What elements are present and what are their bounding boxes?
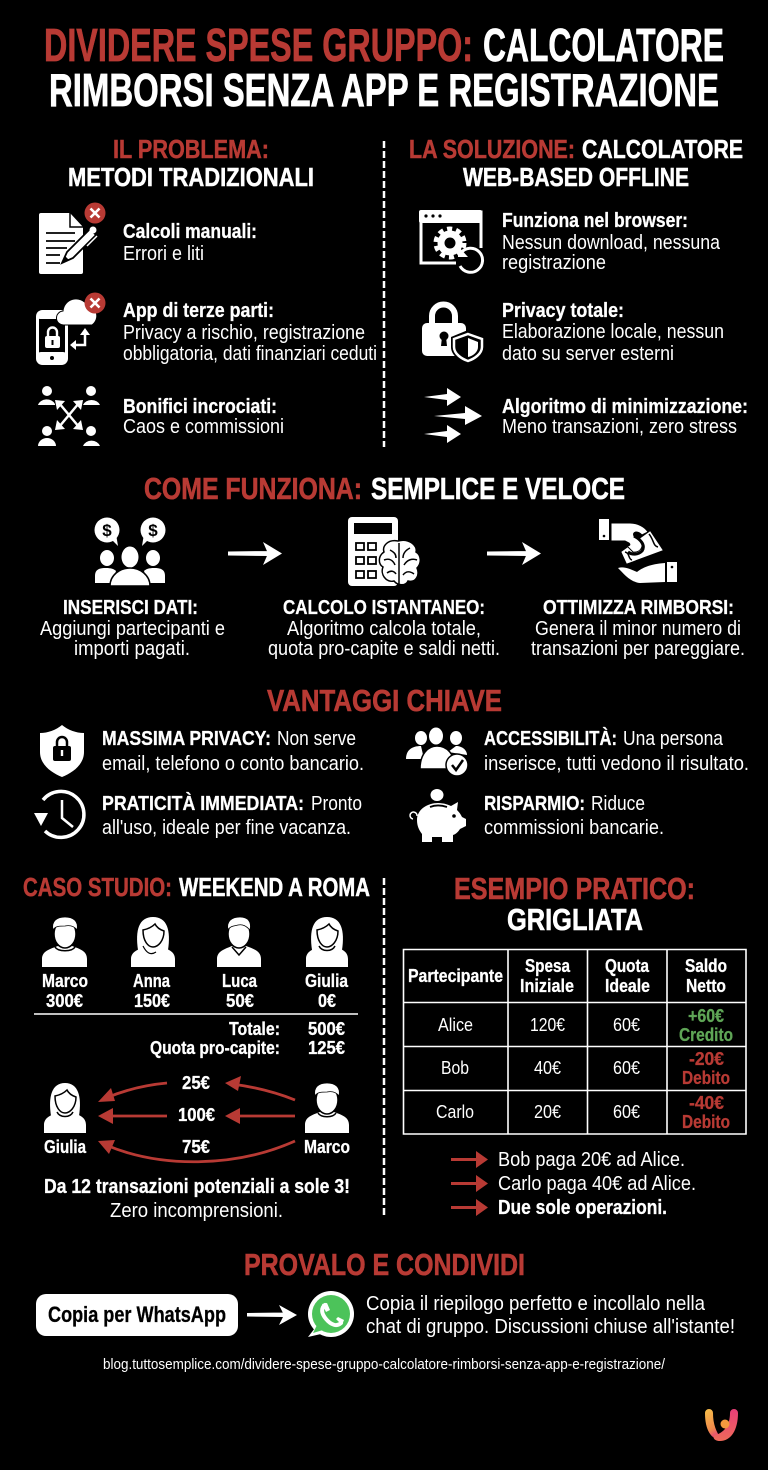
text: funziona nel browser: registrazione	[502, 252, 606, 274]
text: massima privacy	[102, 728, 364, 775]
table: expense breakdown: Netto	[686, 976, 726, 996]
text: funziona nel browser: Nessun download, nessuna	[502, 232, 721, 254]
table: expense breakdown: Spesa	[525, 956, 571, 976]
text: bonifici incrociati: Bonifici incrociati:	[123, 396, 277, 418]
text: whatsapp description	[366, 1293, 735, 1338]
text: payments	[498, 1149, 696, 1219]
transfer labels: 100€	[178, 1105, 215, 1125]
text: payments: Carlo paga 40€ ad Alice.	[498, 1173, 696, 1195]
text: payments: Bob paga 20€ ad Alice.	[498, 1149, 685, 1171]
panel: esempio pratico	[404, 871, 746, 1219]
arrows: marco to giulia transfers	[98, 1076, 295, 1162]
arrow	[247, 1305, 297, 1325]
text: risparmio: RISPARMIO:	[484, 793, 585, 815]
table: expense breakdown: Saldo	[685, 956, 727, 976]
text: ottimizza rimborsi: OTTIMIZZA RIMBORSI:	[543, 597, 734, 619]
participant labels: Luca	[222, 971, 258, 991]
text: massima privacy: MASSIMA PRIVACY:	[102, 728, 271, 750]
transfer labels: 25€	[182, 1073, 210, 1093]
text: privacy totale: Privacy totale:	[502, 300, 624, 322]
text: funziona nel browser: Funziona nel browser:	[502, 210, 688, 232]
panel: come funziona	[40, 471, 745, 660]
transfer labels: 75€	[182, 1137, 210, 1157]
table: expense breakdown: Debito	[682, 1112, 730, 1132]
text: app di terze parti	[123, 300, 377, 365]
table: expense breakdown: Credito	[679, 1025, 733, 1045]
icon: group with money bubbles: $	[102, 521, 112, 540]
table: expense breakdown: 20€	[534, 1102, 561, 1122]
icon: group with money bubbles	[94, 518, 166, 586]
button: copia per whatsapp: Copia per WhatsApp	[48, 1302, 226, 1327]
participant labels: Giulia	[305, 971, 349, 991]
panel: provalo e condividi	[36, 1247, 738, 1441]
text: bonifici incrociati: Caos e commissioni	[123, 416, 284, 438]
text: massima privacy: email, telefono o conto bancario.	[102, 753, 364, 775]
text: ottimizza rimborsi: transazioni per pareggiare.	[531, 638, 745, 660]
table: expense breakdown: Quota	[605, 956, 650, 976]
heading: come funziona: SEMPLICE E VELOCE	[371, 471, 625, 506]
heading: vantaggi chiave: VANTAGGI CHIAVE	[267, 683, 502, 718]
text: privacy totale: Elaborazione locale, nessun	[502, 321, 724, 343]
totals: Totale:	[229, 1019, 280, 1039]
icon: person marco	[42, 917, 87, 967]
text: inserisci dati: Aggiungi partecipanti e	[40, 618, 225, 640]
heading: la soluzione: LA SOLUZIONE:	[409, 134, 575, 164]
heading: la soluzione: WEB-BASED OFFLINE	[463, 162, 689, 192]
participant labels	[42, 971, 349, 1011]
text: privacy totale: dato su server esterni	[502, 343, 674, 365]
heading: il problema: IL PROBLEMA:	[113, 134, 269, 164]
text: case study conclusion: Zero incomprensioni.	[110, 1200, 283, 1222]
arrow	[228, 542, 282, 565]
icon: phone lock cloud with error badge	[37, 292, 106, 364]
title: DIVIDERE SPESE GRUPPO:	[44, 19, 473, 71]
heading: la soluzione	[409, 134, 743, 192]
table: expense breakdown: 60€	[613, 1015, 640, 1035]
text: app di terze parti: obbligatoria, dati finanziari ceduti	[123, 343, 377, 365]
text: calcolo istantaneo: CALCOLO ISTANTANEO:	[283, 597, 485, 619]
heading: come funziona	[144, 471, 625, 506]
table: expense breakdown: Carlo	[436, 1102, 474, 1122]
table: expense breakdown	[404, 950, 746, 1134]
title	[44, 19, 724, 116]
text: ottimizza rimborsi	[531, 597, 745, 660]
text: bonifici incrociati	[123, 396, 284, 438]
text: calcolo istantaneo	[268, 597, 500, 660]
table: expense breakdown: Debito	[682, 1068, 730, 1088]
arrows: payment list	[451, 1151, 488, 1216]
totals: 125€	[308, 1038, 345, 1058]
participant labels: 150€	[134, 991, 170, 1011]
text: case study conclusion	[44, 1176, 350, 1222]
table: expense breakdown: 40€	[534, 1058, 561, 1078]
text: praticita immediata	[102, 792, 362, 839]
text: payments: Due sole operazioni.	[498, 1197, 667, 1219]
icon: person marco payer	[305, 1083, 349, 1133]
icon: whatsapp	[308, 1291, 354, 1337]
text: calcoli manuali	[123, 221, 257, 265]
panel: caso studio	[23, 872, 370, 1222]
participant labels: Marco	[42, 971, 88, 991]
heading: il problema: METODI TRADIZIONALI	[68, 162, 314, 192]
icon: hands exchanging money	[599, 519, 677, 583]
icon: calculator with brain	[348, 517, 420, 586]
transfer labels	[44, 1073, 350, 1157]
arrow	[487, 542, 541, 565]
text: algoritmo di minimizzazione: Meno transazioni, zero stress	[502, 416, 737, 438]
text: calcoli manuali: Errori e liti	[123, 243, 204, 265]
icon: history clock	[34, 791, 84, 837]
participant labels: 50€	[226, 991, 254, 1011]
source url: blog.tuttosemplice.com/dividere-spese-gruppo-calcolatore-rimborsi-senza-app-e-registrazione/	[103, 1356, 666, 1373]
heading: esempio pratico: ESEMPIO PRATICO:	[454, 871, 695, 906]
panel: la soluzione	[409, 134, 748, 443]
icon: three arrows	[424, 388, 482, 443]
text: whatsapp description: chat di gruppo. Discussioni chiuse all'istante!	[366, 1316, 735, 1338]
text: inserisci dati: INSERISCI DATI:	[63, 597, 198, 619]
totals: 500€	[308, 1019, 345, 1039]
button: copia per whatsapp	[36, 1294, 238, 1336]
text: inserisci dati	[40, 597, 225, 660]
text: praticita immediata: PRATICITÀ IMMEDIATA:	[102, 792, 304, 815]
text: accessibilita: Una persona	[623, 728, 724, 750]
icon: crossing transfers network	[38, 386, 100, 446]
table: expense breakdown: Iniziale	[520, 976, 574, 996]
heading: esempio pratico	[454, 871, 695, 937]
icon: piggy bank	[410, 789, 466, 842]
text: calcoli manuali: Calcoli manuali:	[123, 221, 257, 243]
table: expense breakdown: -40€	[689, 1093, 724, 1113]
heading: esempio pratico: GRIGLIATA	[507, 902, 643, 937]
icon: browser with gear	[419, 210, 485, 275]
text: accessibilita	[484, 727, 749, 775]
text: funziona nel browser	[502, 210, 721, 274]
participant labels: 300€	[46, 991, 83, 1011]
text: algoritmo di minimizzazione	[502, 396, 748, 438]
icon: people with check	[406, 728, 468, 776]
panel: il problema	[37, 134, 377, 446]
table: expense breakdown: 120€	[530, 1015, 565, 1035]
text: privacy totale	[502, 300, 724, 365]
text: praticita immediata: Pronto	[311, 793, 362, 815]
text: praticita immediata: all'uso, ideale per fine vacanza.	[102, 817, 351, 839]
table: expense breakdown: Alice	[438, 1015, 473, 1035]
heading: il problema	[68, 134, 314, 192]
text: app di terze parti: Privacy a rischio, registrazione	[123, 322, 365, 344]
text: calcolo istantaneo: quota pro-capite e saldi netti.	[268, 638, 500, 660]
icon: person giulia	[306, 917, 348, 967]
table: expense breakdown: Bob	[441, 1058, 469, 1078]
icon: shield with lock	[40, 725, 84, 777]
icon: brand logo	[705, 1409, 738, 1441]
participant labels: 0€	[318, 991, 336, 1011]
text: inserisci dati: importi pagati.	[74, 638, 190, 660]
text: whatsapp description: Copia il riepilogo perfetto e incollalo nella	[366, 1293, 706, 1315]
text: ottimizza rimborsi: Genera il minor numero di	[535, 618, 741, 640]
table: expense breakdown: 60€	[613, 1058, 640, 1078]
icon: person giulia payer	[44, 1083, 86, 1133]
text: risparmio: commissioni bancarie.	[484, 817, 664, 839]
heading: come funziona: COME FUNZIONA:	[144, 471, 362, 506]
table: expense breakdown: Partecipante	[408, 966, 503, 986]
text: calcolo istantaneo: Algoritmo calcola totale,	[287, 618, 481, 640]
icon: document and pencil with error badge	[39, 202, 106, 274]
heading: provalo e condividi: PROVALO E CONDIVIDI	[244, 1247, 525, 1282]
text: case study conclusion: Da 12 transazioni potenziali a sole 3!	[44, 1176, 350, 1198]
participant labels: Anna	[133, 971, 171, 991]
panel: vantaggi chiave	[34, 683, 749, 842]
transfer labels: Giulia	[44, 1137, 87, 1157]
text: accessibilita: ACCESSIBILITÀ:	[484, 727, 617, 750]
heading: caso studio: CASO STUDIO:	[23, 872, 172, 902]
text: app di terze parti: App di terze parti:	[123, 300, 274, 322]
text: accessibilita: inserisce, tutti vedono il risultato.	[484, 753, 749, 775]
icon: person luca	[217, 917, 261, 967]
transfer labels: Marco	[304, 1137, 350, 1157]
text: massima privacy: Non serve	[277, 728, 356, 750]
table: expense breakdown: 60€	[613, 1102, 640, 1122]
icon: person anna	[131, 917, 175, 967]
heading: caso studio: WEEKEND A ROMA	[179, 872, 370, 902]
text: risparmio: Riduce	[591, 793, 645, 815]
icon: group with money bubbles: $	[148, 521, 158, 540]
table: expense breakdown: +60€	[688, 1006, 724, 1026]
text: risparmio	[484, 793, 664, 839]
table: expense breakdown: -20€	[689, 1049, 724, 1069]
heading: caso studio	[23, 872, 370, 902]
totals	[150, 1019, 345, 1058]
icon: padlock with shield	[422, 304, 485, 364]
totals: Quota pro-capite:	[150, 1038, 280, 1058]
table: expense breakdown: Ideale	[605, 976, 650, 996]
